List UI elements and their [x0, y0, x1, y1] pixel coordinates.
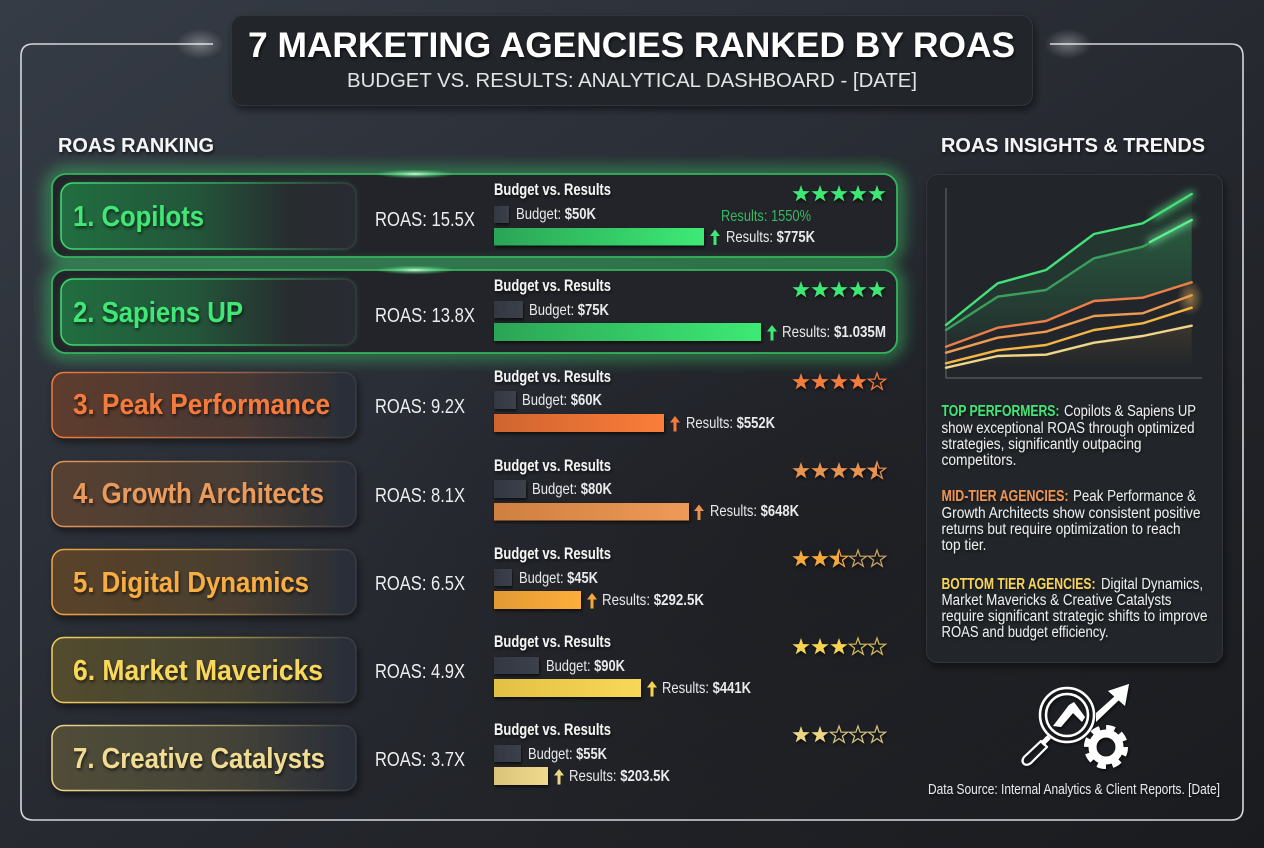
agency label: 5. Digital Dynamics — [73, 567, 309, 599]
icon: magnifier, growth arrow and gear — [1022, 684, 1129, 766]
budget value: Budget: $80K — [532, 481, 612, 498]
star rating — [792, 373, 886, 389]
bar heading: Budget vs. Results — [494, 181, 611, 199]
budget bar — [494, 657, 539, 674]
insight: top performers: Copilots & Sapiens UP — [1064, 403, 1196, 420]
insight: bottom tier agencies: Market Mavericks & Creative Catalysts — [942, 592, 1172, 609]
agency label: 6. Market Mavericks — [73, 655, 323, 687]
results bar — [494, 414, 664, 432]
insight: mid-tier agencies: top tier. — [942, 537, 986, 554]
heading: ROAS ranking: ROAS RANKING — [58, 135, 214, 157]
results arrow — [587, 593, 597, 608]
insight: top performers — [942, 403, 1196, 469]
agency label: 4. Growth Architects — [73, 478, 324, 510]
bar heading: Budget vs. Results — [494, 457, 611, 475]
results value: Results: $775K — [726, 229, 815, 246]
star rating — [792, 185, 886, 201]
row 4: Growth Architects — [52, 457, 886, 526]
budget value: Budget: $60K — [522, 392, 602, 409]
results arrow — [767, 325, 777, 340]
budget bar — [494, 301, 523, 318]
bar heading: Budget vs. Results — [494, 277, 611, 295]
insight: mid-tier agencies: MID-TIER AGENCIES: — [942, 488, 1068, 505]
insight: top performers: strategies, significantly outpacing — [942, 436, 1142, 453]
results arrow — [694, 504, 704, 520]
insight: mid-tier agencies — [942, 488, 1200, 554]
subtitle: BUDGET VS. RESULTS: ANALYTICAL DASHBOARD - [DATE] — [347, 70, 917, 92]
agency label — [52, 726, 356, 790]
agency label: 3. Peak Performance — [73, 389, 330, 421]
results bar — [494, 503, 689, 520]
results value: Results: $1.035M — [782, 324, 886, 341]
budget value: Budget: $90K — [546, 658, 625, 675]
bar heading: Budget vs. Results — [494, 545, 611, 563]
insight: bottom tier agencies: require significant strategic shifts to improve — [942, 608, 1208, 625]
row 7: Creative Catalysts — [52, 721, 886, 790]
agency label — [52, 372, 356, 438]
insight: bottom tier agencies: BOTTOM TIER AGENCIES: — [942, 576, 1096, 593]
results value: Results: $441K — [662, 680, 751, 697]
star rating — [792, 281, 886, 297]
budget bar — [494, 480, 526, 498]
budget bar — [494, 391, 516, 409]
ROAS value: ROAS: 8.1X — [375, 485, 465, 507]
results bar — [494, 228, 704, 246]
row 6: Market Mavericks — [52, 633, 886, 702]
star rating — [792, 462, 886, 478]
insight: top performers: competitors. — [942, 452, 1016, 469]
results percentage: Results: 1550% — [721, 208, 811, 225]
results arrow — [710, 230, 720, 245]
budget value: Budget: $45K — [519, 570, 598, 587]
bar heading: Budget vs. Results — [494, 633, 611, 651]
agency label — [61, 279, 356, 345]
insight: bottom tier agencies: ROAS and budget efficiency. — [942, 624, 1108, 641]
row 1: Copilots — [52, 170, 897, 257]
insight: mid-tier agencies: Peak Performance & — [1073, 488, 1197, 505]
agency label — [52, 638, 356, 702]
insight: bottom tier agencies — [942, 576, 1208, 641]
agency label: 1. Copilots — [73, 201, 204, 233]
agency label: 2. Sapiens UP — [73, 297, 243, 329]
insight: mid-tier agencies: Growth Architects show consistent positive — [942, 505, 1200, 522]
panel: insights and trends — [926, 174, 1222, 662]
title panel — [232, 16, 1032, 106]
budget bar — [494, 569, 512, 586]
results arrow — [647, 681, 657, 696]
results value: Results: $648K — [710, 503, 799, 520]
insight: top performers: show exceptional ROAS through optimized — [942, 420, 1194, 437]
star rating — [792, 726, 886, 742]
results bar — [494, 323, 761, 341]
results value: Results: $552K — [686, 415, 775, 432]
row 5: Digital Dynamics — [52, 545, 886, 614]
ROAS value: ROAS: 15.5X — [375, 209, 475, 231]
ROAS value: ROAS: 9.2X — [375, 396, 465, 418]
bar heading: Budget vs. Results — [494, 368, 611, 386]
results value: Results: $203.5K — [569, 768, 670, 785]
results bar — [494, 767, 548, 785]
row 2: Sapiens UP — [52, 266, 897, 353]
ROAS value: ROAS: 13.8X — [375, 305, 475, 327]
budget value: Budget: $50K — [516, 206, 596, 223]
results bar — [494, 679, 641, 697]
ROAS value: ROAS: 6.5X — [375, 573, 465, 595]
budget value: Budget: $55K — [528, 746, 607, 763]
ROAS value: ROAS: 4.9X — [375, 661, 465, 683]
heading: ROAS insights and trends: ROAS INSIGHTS & TRENDS — [941, 135, 1205, 157]
line chart — [946, 188, 1203, 378]
agency label — [52, 550, 356, 614]
row 3: Peak Performance — [52, 368, 886, 438]
bar heading: Budget vs. Results — [494, 721, 611, 739]
star rating — [792, 638, 886, 654]
agency label: 7. Creative Catalysts — [73, 743, 325, 775]
ROAS value: ROAS: 3.7X — [375, 749, 465, 771]
star rating — [792, 550, 886, 566]
insight: mid-tier agencies: returns but require optimization to reach — [942, 521, 1180, 538]
budget value: Budget: $75K — [529, 302, 609, 319]
results value: Results: $292.5K — [602, 592, 704, 609]
agency label — [52, 462, 356, 526]
title: 7 MARKETING AGENCIES RANKED BY ROAS — [248, 26, 1015, 65]
results arrow — [554, 769, 564, 784]
insight: bottom tier agencies: Digital Dynamics, — [1101, 576, 1203, 593]
results bar — [494, 591, 581, 609]
agency label — [61, 183, 356, 249]
budget bar — [494, 206, 509, 223]
budget bar — [494, 745, 521, 762]
insight: top performers: TOP PERFORMERS: — [942, 403, 1060, 420]
results arrow — [670, 416, 680, 432]
